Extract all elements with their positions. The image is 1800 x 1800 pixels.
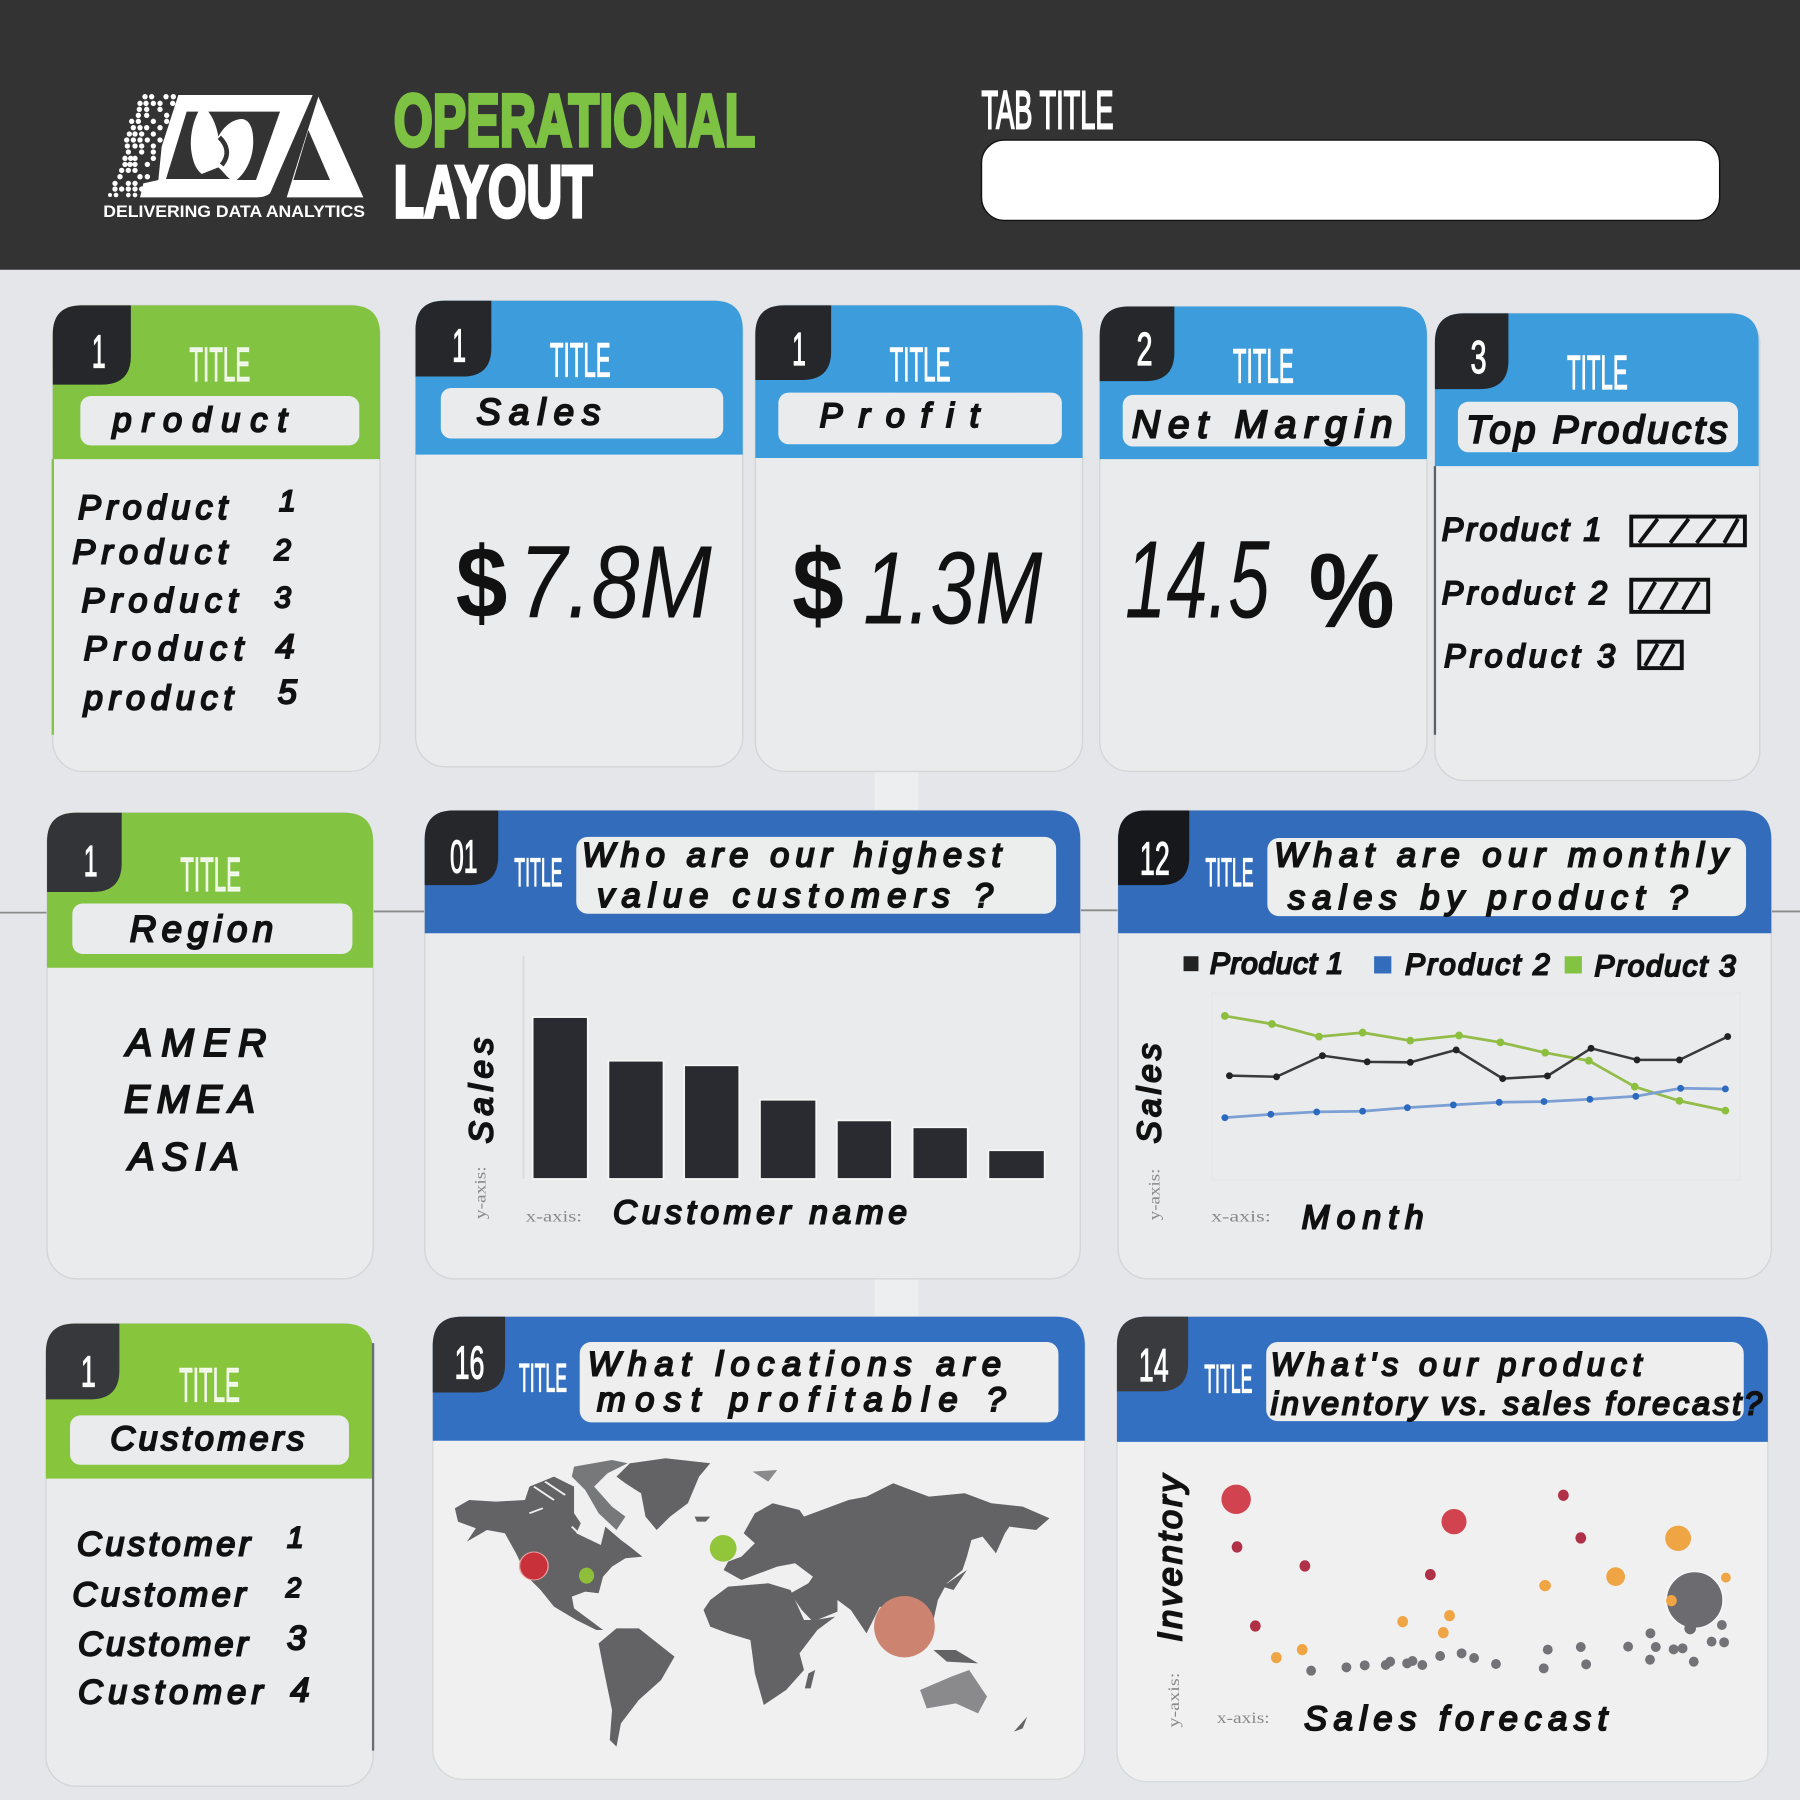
bar chart: Customer name (613, 1195, 907, 1232)
panel: net margin KPI: TITLE (1233, 339, 1294, 393)
value: $1.3M: 1.3M (863, 529, 1043, 645)
panel: sales KPI: 1 (452, 320, 466, 372)
panel: net margin KPI (1100, 307, 1427, 771)
product list: 1 (279, 485, 296, 518)
scatter plot: y-axis: (1166, 1673, 1183, 1728)
panel: region filter: 1 (84, 838, 98, 886)
product list: Product (72, 534, 229, 572)
panel: bar chart card: TITLE (514, 850, 563, 895)
bar chart: Sales (463, 1038, 500, 1143)
hand-drawn product bars (1442, 512, 1745, 674)
panel: customers filter: TITLE (179, 1359, 240, 1413)
world map with bubbles (455, 1458, 1050, 1747)
scatter plot: Sales forecast (1304, 1700, 1609, 1738)
region list: AMER (124, 1022, 266, 1065)
panel: customers filter: Customers (110, 1420, 304, 1458)
bar chart: x-axis: (526, 1208, 582, 1225)
panel: region filter: Region (130, 908, 273, 949)
panel: scatter chart card: inventory vs. sales forecast? (1271, 1385, 1762, 1421)
panel: customers filter: 1 (81, 1349, 96, 1397)
panel: bar chart card: value customers ? (597, 877, 994, 915)
line chart: Sales (1132, 1043, 1169, 1143)
logo: DELIVERING DATA ANALYTICS (103, 202, 365, 221)
title: operational layout (394, 78, 755, 233)
panel: line chart card: What are our monthly (1274, 837, 1729, 875)
product list: 2 (273, 534, 291, 567)
scatter plot: x-axis: (1217, 1710, 1270, 1727)
panel: profit KPI: 1 (792, 323, 806, 375)
bar chart (463, 956, 1045, 1232)
panel: sales KPI: Sales (476, 392, 600, 433)
title: operational layout: LAYOUT (394, 150, 592, 233)
panel: line chart card (1118, 810, 1771, 1279)
panel: bar chart card: 01 (450, 830, 478, 882)
product list: 3 (274, 581, 291, 614)
bar chart: y-axis: (473, 1166, 490, 1219)
value: 14.5%: % (1309, 532, 1395, 650)
region list: EMEA (124, 1078, 255, 1121)
product list: Product (84, 630, 245, 668)
tab title input box (982, 140, 1720, 220)
panel: sales KPI: TITLE (550, 334, 611, 388)
panel: scatter chart card: What's our product (1271, 1346, 1644, 1382)
scatter plot (1151, 1473, 1731, 1738)
logo (103, 94, 365, 221)
panel: line chart card: TITLE (1205, 850, 1254, 895)
panel: top products (1435, 313, 1760, 781)
panel: map card: What locations are (588, 1345, 1001, 1383)
panel: product filter: TITLE (189, 338, 250, 392)
value: $7.8M: 7.8M (519, 524, 713, 640)
value: $7.8M: $ (456, 528, 507, 640)
product list (72, 485, 298, 717)
panel: scatter chart card: 14 (1139, 1339, 1169, 1391)
panel: line chart card: sales by product ? (1288, 879, 1688, 917)
panel: product filter: 1 (92, 325, 106, 377)
region list: ASIA (127, 1136, 239, 1179)
tab title label: TAB TITLE (982, 81, 1114, 141)
panel: bar chart card: Who are our highest (582, 837, 1002, 875)
customer list (72, 1521, 310, 1712)
customer list: 4 (290, 1671, 310, 1709)
panel: top products: Top Products (1466, 409, 1728, 452)
panel: scatter chart card (1117, 1317, 1768, 1782)
line chart (1132, 993, 1740, 1236)
line chart: y-axis: (1146, 1169, 1163, 1220)
panel: bar chart card (425, 810, 1080, 1279)
product list: product (83, 679, 234, 717)
product list: Product (82, 582, 239, 620)
panel: profit KPI: Profit (820, 397, 981, 435)
value: $1.3M (792, 529, 1043, 645)
legend (1184, 947, 1736, 983)
customer list: 3 (287, 1620, 306, 1658)
value: $1.3M: $ (792, 530, 844, 642)
panel: product filter: product (112, 402, 288, 440)
header band (0, 0, 1800, 270)
panel: region filter (47, 813, 373, 1279)
value: 14.5%: 14.5 (1125, 519, 1270, 642)
customer list: Customer (77, 1525, 252, 1563)
hand-drawn product bars: Product 3 (1444, 638, 1615, 674)
panel: profit KPI: TITLE (890, 338, 951, 392)
panel: sales KPI (416, 301, 743, 767)
panel: net margin KPI: Net Margin (1132, 403, 1392, 446)
product list: 5 (278, 674, 298, 712)
panel: net margin KPI: 2 (1136, 323, 1153, 375)
panel: map card (433, 1317, 1085, 1779)
scatter plot: Inventory (1151, 1473, 1189, 1642)
region list (124, 1022, 266, 1179)
panel: profit KPI (755, 305, 1083, 771)
value: $7.8M (456, 524, 713, 640)
product list: Product (78, 489, 229, 527)
panel: scatter chart card: TITLE (1204, 1356, 1252, 1401)
legend: Product 2 (1405, 949, 1550, 982)
product list: 4 (276, 628, 295, 666)
legend: Product 3 (1595, 950, 1736, 983)
hand-drawn product bars: Product 1 (1442, 512, 1601, 548)
title: operational layout: OPERATIONAL (394, 78, 755, 162)
panel: product filter (53, 305, 380, 771)
customer list: Customer (72, 1576, 247, 1614)
legend: Product 1 (1210, 947, 1343, 980)
customer list: Customer (78, 1674, 264, 1712)
panel: line chart card: 12 (1140, 833, 1170, 885)
customer list: 2 (285, 1572, 301, 1603)
line chart: Month (1302, 1199, 1423, 1236)
panel: customers filter (46, 1324, 373, 1786)
line chart: x-axis: (1211, 1208, 1271, 1225)
hand-drawn product bars: Product 2 (1442, 575, 1607, 611)
panel: top products: TITLE (1567, 346, 1628, 400)
panel: map card: most profitable ? (597, 1381, 1006, 1419)
customer list: 1 (287, 1521, 304, 1554)
panel: map card: TITLE (519, 1355, 567, 1400)
customer list: Customer (78, 1625, 249, 1663)
panel: region filter: TITLE (180, 848, 241, 902)
panel: map card: 16 (455, 1337, 484, 1389)
panel: top products: 3 (1471, 331, 1487, 383)
